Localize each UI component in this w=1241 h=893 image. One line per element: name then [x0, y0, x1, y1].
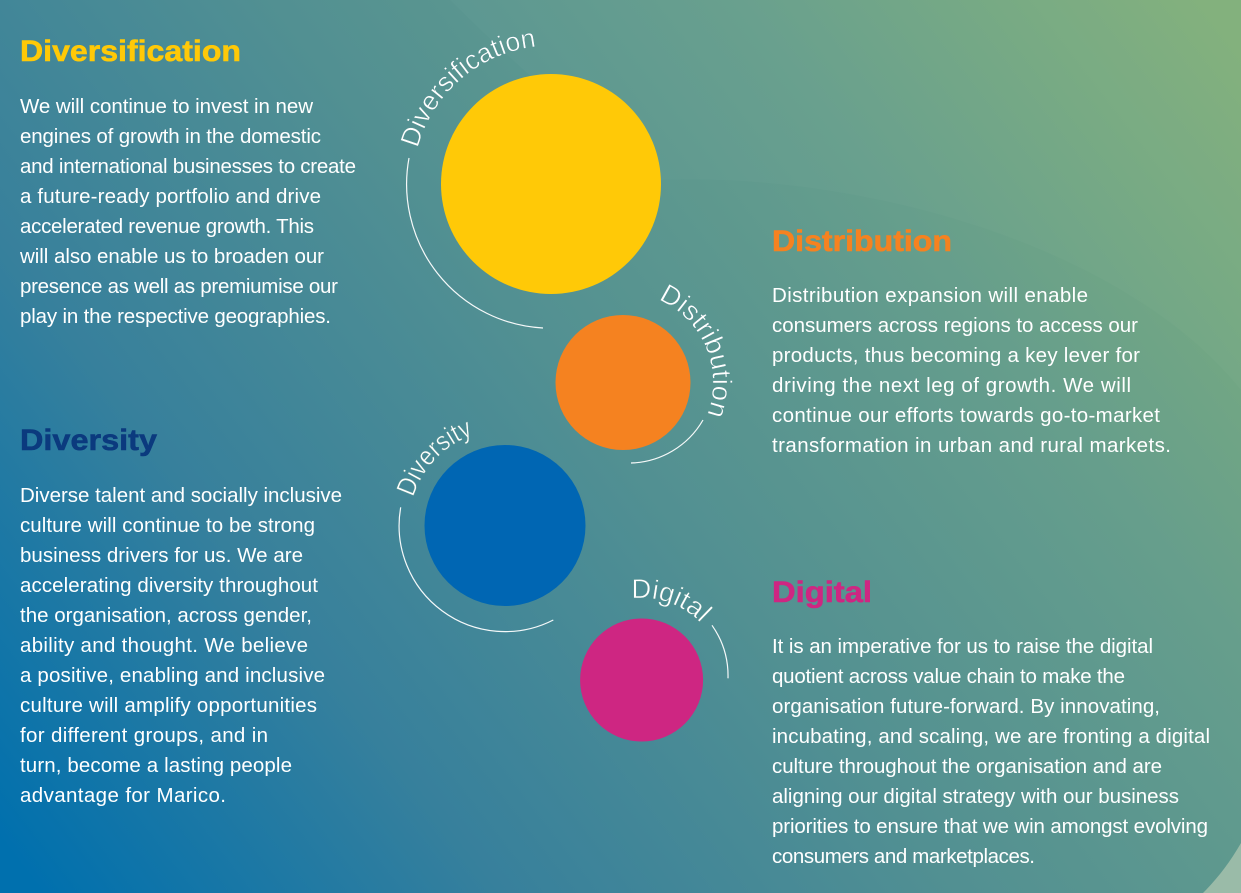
diagram: yellow circle Diversification: Diversification	[400, 33, 534, 146]
diagram: orange circle Distribution	[556, 284, 732, 464]
text block: Diversification: accelerated revenue growth. This	[20, 215, 314, 238]
text block: Diversification: will also enable us to broaden our	[19, 245, 324, 268]
background corner shape	[1203, 843, 1241, 893]
background light swoosh	[450, 0, 1241, 390]
diagram: pink circle Digital	[580, 579, 729, 742]
diagram: yellow circle Diversification	[400, 33, 661, 329]
diagram: blue circle Diversity: Diversity	[396, 422, 469, 496]
text block: Diversity: a positive, enabling and inclusive	[20, 664, 325, 687]
panel: Diversity	[20, 424, 342, 807]
text block: Diversity: culture will continue to be strong	[20, 514, 315, 537]
text block: Digital: consumers and marketplaces.	[772, 845, 1035, 868]
text block: Distribution: Distribution expansion will enable	[772, 284, 1088, 307]
panel: Distribution	[772, 225, 1171, 457]
text block: Distribution: transformation in urban and rural markets.	[772, 434, 1171, 457]
diagram: orange circle Distribution: Distribution	[660, 284, 732, 416]
text block: Diversification: presence as well as premiumise our	[20, 275, 338, 298]
diagram: blue circle Diversity	[396, 422, 586, 632]
text block: Diversity: ability and thought. We believe	[20, 634, 308, 657]
text block: Digital: culture throughout the organisation and are	[772, 755, 1162, 778]
text block: Diversity: culture will amplify opportunities	[20, 694, 317, 717]
text block: Distribution	[772, 284, 1171, 457]
text block: Diversity: for different groups, and in	[20, 724, 268, 747]
text block: Digital: priorities to ensure that we win amongst evolving	[772, 815, 1208, 838]
heading: Digital: Digital	[772, 576, 872, 609]
panel: Diversification	[19, 35, 356, 328]
text block: Diversification: and international businesses to create	[20, 155, 356, 178]
text block: Diversity	[20, 484, 342, 807]
text block: Digital: quotient across value chain to make the	[772, 665, 1125, 688]
text block: Diversity: accelerating diversity throughout	[20, 574, 318, 597]
text block: Diversity: turn, become a lasting people	[20, 754, 292, 777]
text block: Digital: It is an imperative for us to raise the digital	[772, 635, 1153, 658]
text block: Diversification	[19, 95, 356, 328]
diagram: pink circle Digital: Digital	[634, 579, 713, 622]
text block: Diversification: We will continue to invest in new	[20, 95, 313, 118]
text block: Distribution: driving the next leg of growth. We will	[772, 374, 1131, 397]
text block: Diversification: a future-ready portfolio and drive	[20, 185, 321, 208]
heading: Distribution: Distribution	[772, 225, 952, 258]
text block: Distribution: continue our efforts towards go-to-market	[772, 404, 1160, 427]
text block: Digital: aligning our digital strategy with our business	[772, 785, 1179, 808]
text block: Diversification: engines of growth in the domestic	[20, 125, 321, 148]
text block: Digital: incubating, and scaling, we are fronting a digital	[772, 725, 1210, 748]
text block: Digital	[772, 635, 1210, 868]
text block: Diversity: the organisation, across gender,	[20, 604, 312, 627]
text block: Diversification: play in the respective geographies.	[20, 305, 331, 328]
text block: Distribution: consumers across regions to access our	[772, 314, 1138, 337]
panel: Digital	[772, 576, 1210, 868]
text block: Digital: organisation future-forward. By innovating,	[772, 695, 1160, 718]
text block: Diversity: advantage for Marico.	[20, 784, 226, 807]
text block: Diversity: business drivers for us. We are	[20, 544, 303, 567]
text block: Distribution: products, thus becoming a key lever for	[772, 344, 1140, 367]
heading: Diversification: Diversification	[20, 35, 241, 68]
text block: Diversity: Diverse talent and socially inclusive	[20, 484, 342, 507]
heading: Diversity: Diversity	[20, 424, 157, 457]
